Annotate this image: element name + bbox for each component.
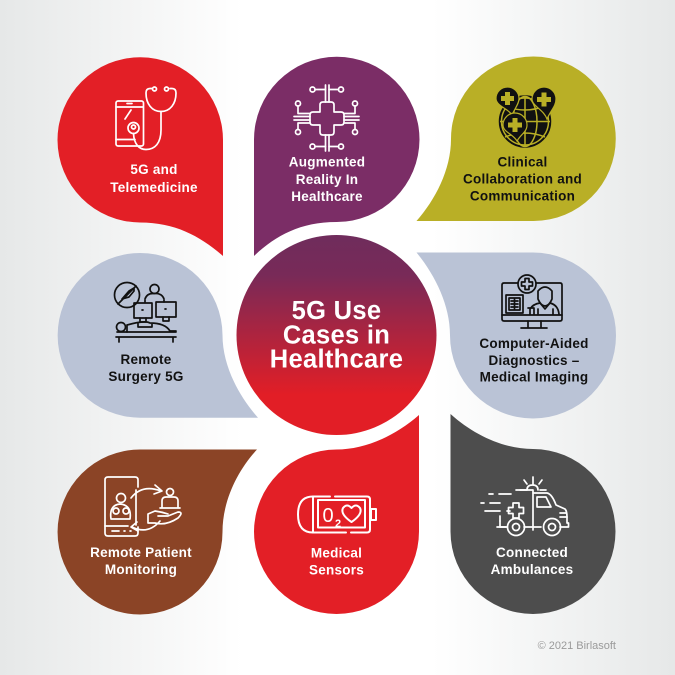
title: Healthcare bbox=[270, 346, 403, 374]
icon: doctor on monitor bbox=[502, 275, 562, 328]
label: Clinical bbox=[497, 154, 548, 170]
icon: oxygen heart sensor bbox=[298, 496, 376, 532]
title: 5G Use bbox=[292, 297, 381, 325]
panel: Clinical Collaboration and Communication bbox=[416, 56, 616, 221]
label: Augmented bbox=[289, 154, 365, 170]
subscript 2: 2 bbox=[335, 518, 341, 530]
label: Medical bbox=[311, 546, 362, 560]
icon: globe with pins bbox=[496, 87, 556, 147]
panel: Augmented Reality In Healthcare bbox=[254, 57, 420, 256]
label: Healthcare bbox=[291, 189, 363, 204]
copyright: © 2021 Birlasoft bbox=[538, 640, 616, 652]
label: Remote Patient bbox=[90, 545, 192, 560]
panel: Medical Sensors bbox=[254, 415, 419, 614]
title: Cases in bbox=[283, 322, 390, 350]
hub bbox=[236, 235, 436, 435]
panel: Connected Ambulances bbox=[450, 414, 616, 614]
label: Computer-Aided bbox=[479, 336, 589, 351]
label: Ambulances bbox=[491, 562, 573, 577]
label: Connected bbox=[496, 545, 568, 560]
label: Reality In bbox=[296, 172, 358, 187]
label: Collaboration and bbox=[463, 172, 582, 186]
icon: digital cross bbox=[294, 85, 359, 151]
label: Sensors bbox=[309, 562, 364, 578]
label: Telemedicine bbox=[110, 180, 198, 195]
label: Medical Imaging bbox=[480, 370, 588, 384]
panel: 5G and Telemedicine bbox=[58, 57, 223, 256]
panel: Computer-Aided Diagnostics bbox=[416, 252, 616, 418]
label: Monitoring bbox=[105, 562, 177, 577]
label: Communication bbox=[470, 188, 575, 204]
label: Diagnostics – bbox=[488, 353, 580, 368]
panel: Remote Patient Monitoring bbox=[58, 450, 257, 614]
label: Surgery 5G bbox=[108, 369, 184, 384]
label: Remote bbox=[120, 352, 172, 367]
icon: phone, patient and care hand bbox=[105, 477, 181, 536]
O2 readout: 0 bbox=[322, 505, 334, 527]
icon: ambulance bbox=[481, 477, 568, 536]
label: 5G and bbox=[130, 162, 178, 177]
icon: phone and stethoscope bbox=[116, 87, 176, 150]
icon: surgeon at monitors bbox=[114, 282, 176, 342]
panel: Remote Surgery 5G bbox=[58, 253, 258, 418]
